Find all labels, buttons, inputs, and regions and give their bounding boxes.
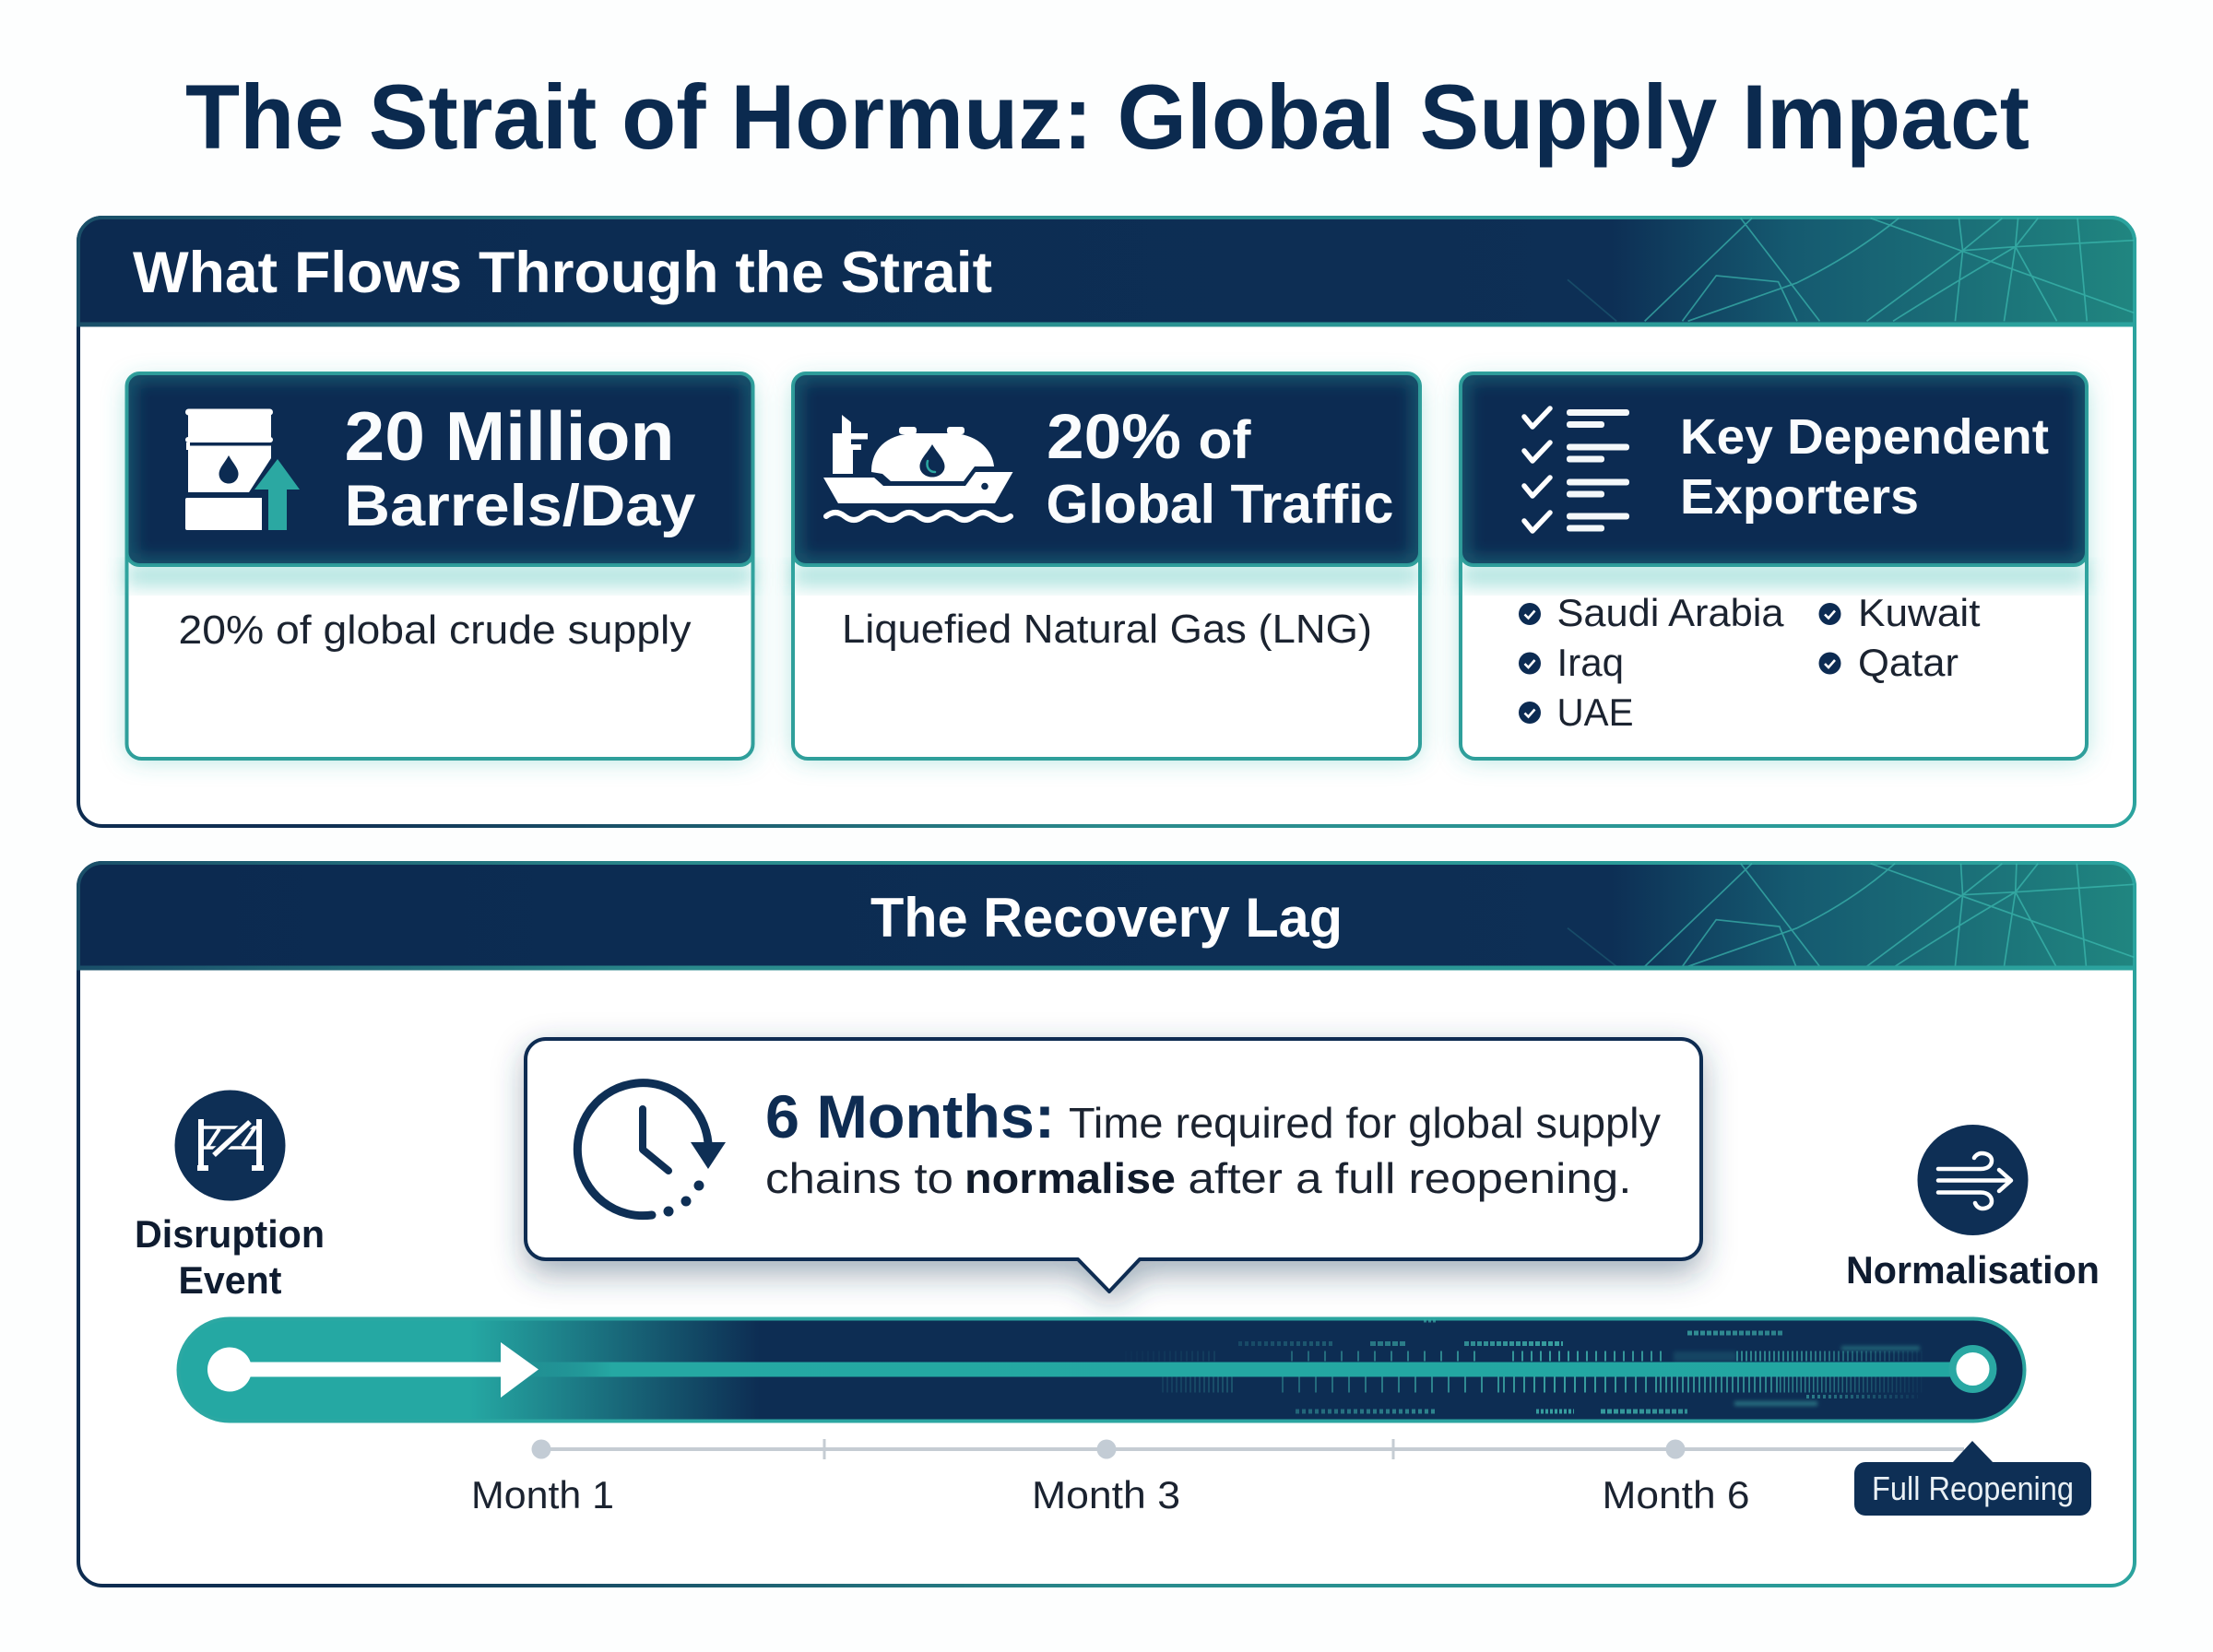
icon: normalisation wind bbox=[1918, 1125, 2029, 1235]
card: 20 million barrels per day: Barrels/Day bbox=[345, 474, 695, 538]
month labels: Month 3 bbox=[1032, 1473, 1180, 1516]
panel frame bbox=[78, 218, 2135, 826]
end node bbox=[1953, 1349, 1994, 1389]
panel: the recovery lag bbox=[77, 863, 2136, 1586]
panel header band bbox=[77, 863, 2136, 970]
month labels: Month 6 bbox=[1603, 1473, 1750, 1516]
icon: disruption barrier bbox=[175, 1090, 286, 1200]
card: 20 million barrels per day bbox=[127, 373, 752, 760]
month labels: Month 1 bbox=[471, 1473, 614, 1516]
card: key dependent exporters bbox=[1461, 373, 2087, 760]
label: disruption event bbox=[135, 1212, 325, 1302]
arrow: disruption start bbox=[207, 1342, 538, 1398]
panel frame bbox=[78, 863, 2135, 1586]
timeline bar bbox=[179, 1318, 2025, 1422]
stat text: of bbox=[1199, 410, 1251, 470]
callout: 6 months bbox=[526, 1039, 1702, 1304]
progress line bbox=[526, 1363, 1973, 1377]
card heading: Key Dependent bbox=[1680, 409, 2049, 465]
card description: Liquefied Natural Gas (LNG) bbox=[842, 607, 1372, 652]
month labels bbox=[471, 1473, 1750, 1516]
callout text bbox=[765, 1082, 1661, 1202]
stat text: 20 Million bbox=[345, 397, 675, 475]
label: normalisation: Normalisation bbox=[1846, 1248, 2100, 1292]
stat text: 20% bbox=[1047, 401, 1181, 472]
list: exporters: UAE bbox=[1556, 690, 1634, 734]
icon: checklist bbox=[1524, 408, 1629, 531]
icon: oil barrel with up arrow bbox=[185, 409, 300, 530]
list: exporters: Iraq bbox=[1556, 641, 1624, 684]
icon: LNG tanker ship bbox=[823, 415, 1012, 520]
callout text: chains to bbox=[765, 1154, 953, 1202]
callout text: Time required for global supply bbox=[1069, 1099, 1661, 1147]
title: The Strait of Hormuz: Global Supply Impact bbox=[185, 65, 2030, 168]
label: disruption event: Event bbox=[179, 1258, 282, 1302]
tag: full reopening bbox=[1854, 1441, 2091, 1516]
panel: what flows through the strait bbox=[77, 218, 2136, 826]
card: 20% of global traffic: Global Traffic bbox=[1046, 474, 1394, 535]
icon: clock with arrow bbox=[577, 1083, 726, 1217]
label: disruption event: Disruption bbox=[135, 1212, 325, 1256]
glow streaks bbox=[1674, 1346, 1920, 1406]
list: exporters: Kuwait bbox=[1858, 591, 1981, 634]
list: exporters: Qatar bbox=[1858, 641, 1959, 684]
callout text: after a full reopening. bbox=[1188, 1154, 1632, 1202]
callout text: normalise bbox=[964, 1154, 1176, 1202]
list: exporters: Saudi Arabia bbox=[1556, 591, 1784, 634]
tag: full reopening: Full Reopening bbox=[1872, 1469, 2074, 1507]
card: 20% of global traffic bbox=[793, 373, 1420, 760]
list: exporters bbox=[1519, 591, 1981, 734]
month axis bbox=[471, 1439, 1964, 1516]
stat text bbox=[1047, 401, 1251, 472]
panel heading: The Recovery Lag bbox=[870, 887, 1343, 949]
panel heading: What Flows Through the Strait bbox=[133, 241, 992, 305]
card: key dependent exporters: Exporters bbox=[1680, 469, 1919, 525]
data-texture ticks bbox=[1125, 1321, 1923, 1411]
callout text: 6 Months: bbox=[765, 1082, 1055, 1150]
panel header band bbox=[77, 218, 2136, 326]
card description: 20% of global crude supply bbox=[179, 608, 692, 653]
